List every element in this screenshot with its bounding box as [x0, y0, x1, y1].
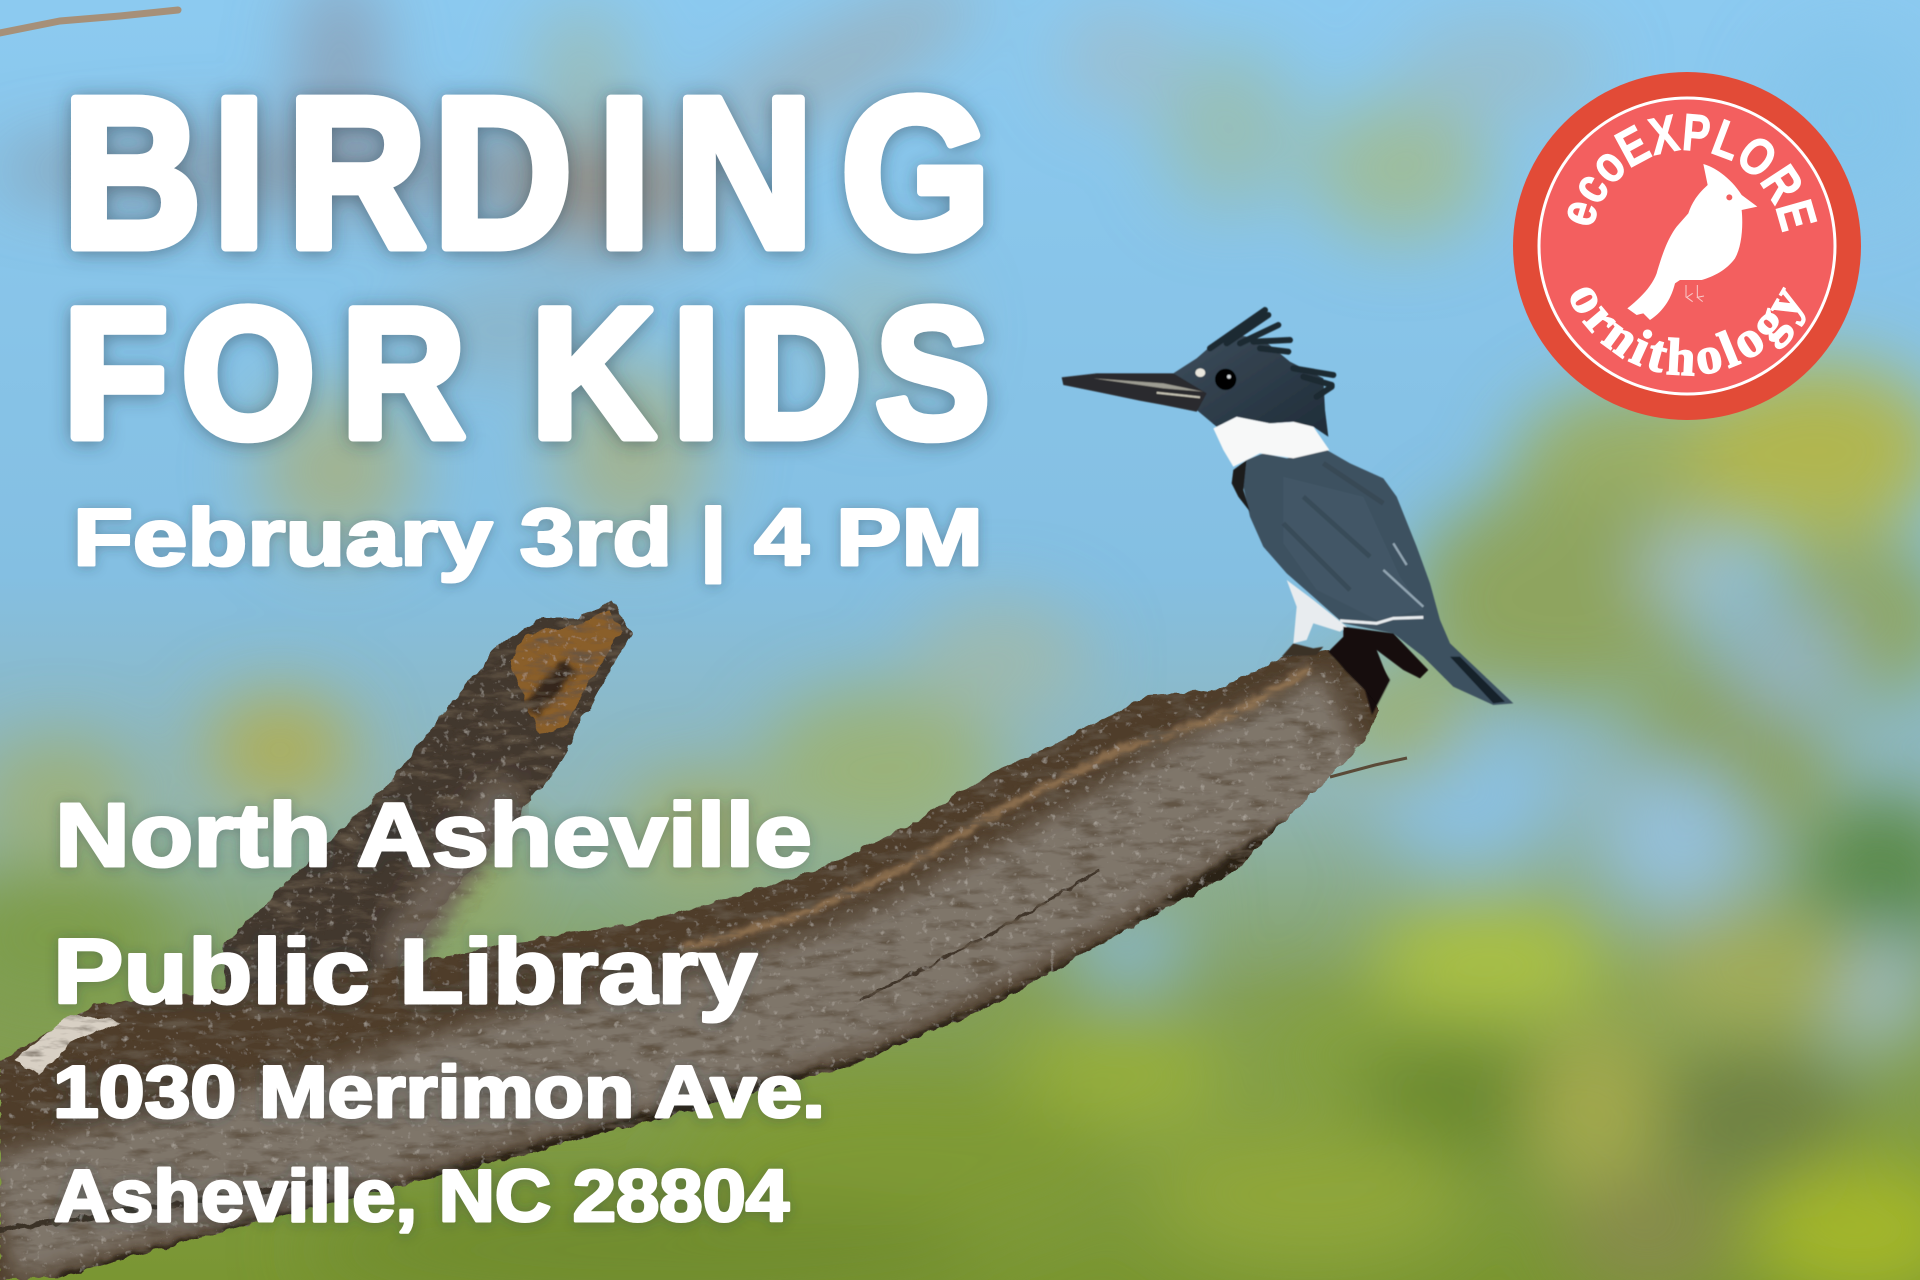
thin twig on branch end	[1330, 758, 1407, 777]
tail stripe	[1450, 657, 1505, 703]
white collar	[1213, 417, 1329, 467]
dark lower edge	[60, 830, 1290, 1280]
orange bark ridge	[680, 668, 1310, 950]
badge inner disc	[1539, 98, 1835, 394]
wing edge	[1340, 617, 1423, 623]
lore spot	[1195, 368, 1205, 377]
broken orange wood at limb tip	[510, 610, 622, 735]
right midground	[1509, 383, 1769, 563]
grey bark centre band	[0, 730, 1350, 1220]
library name line 1: North Asheville	[55, 786, 812, 886]
city state zip: Asheville, NC 28804	[54, 1156, 789, 1237]
eye	[1215, 369, 1236, 390]
branch: main limb carrying the kingfisher	[0, 650, 1379, 1280]
library name line 2: Public Library	[53, 921, 757, 1023]
location and address	[53, 786, 825, 1237]
title line 2: FOR KIDS	[63, 269, 990, 476]
bark crack	[860, 870, 1100, 1000]
badge bottom text: ornithology	[1570, 286, 1806, 376]
icon: belted kingfisher perched	[1062, 310, 1513, 705]
icon: white cardinal silhouette	[1627, 164, 1757, 320]
twig: top-left corner	[0, 10, 178, 33]
beak	[1062, 373, 1207, 412]
title: BIRDING FOR KIDS	[62, 54, 991, 476]
dark chest patch	[1232, 460, 1250, 512]
branch: upper broken limb	[223, 601, 632, 1060]
lichen patch at left	[14, 1015, 122, 1075]
dark undertail	[1328, 627, 1428, 703]
dark broken end below bird	[1332, 640, 1390, 715]
date and time: February 3rd | 4 PM	[73, 493, 983, 584]
badge outer ring	[1513, 72, 1861, 420]
upper right foliage	[1160, 50, 1300, 210]
badge: ecoEXPLORE ornithology	[1513, 72, 1861, 420]
street address: 1030 Merrimon Ave.	[53, 1052, 825, 1133]
blurred grey branches behind the title	[0, 136, 670, 204]
white belly	[1287, 580, 1347, 643]
feet	[1282, 643, 1323, 657]
bottom and left foliage	[680, 1080, 1120, 1240]
title line 1: BIRDING	[62, 54, 991, 293]
crest feathers	[1210, 310, 1333, 397]
kingfisher body	[1243, 450, 1513, 705]
badge top text: ecoEXPLORE	[1568, 114, 1818, 232]
head and crest	[1173, 333, 1328, 437]
bottom right foliage	[1372, 901, 1612, 1021]
